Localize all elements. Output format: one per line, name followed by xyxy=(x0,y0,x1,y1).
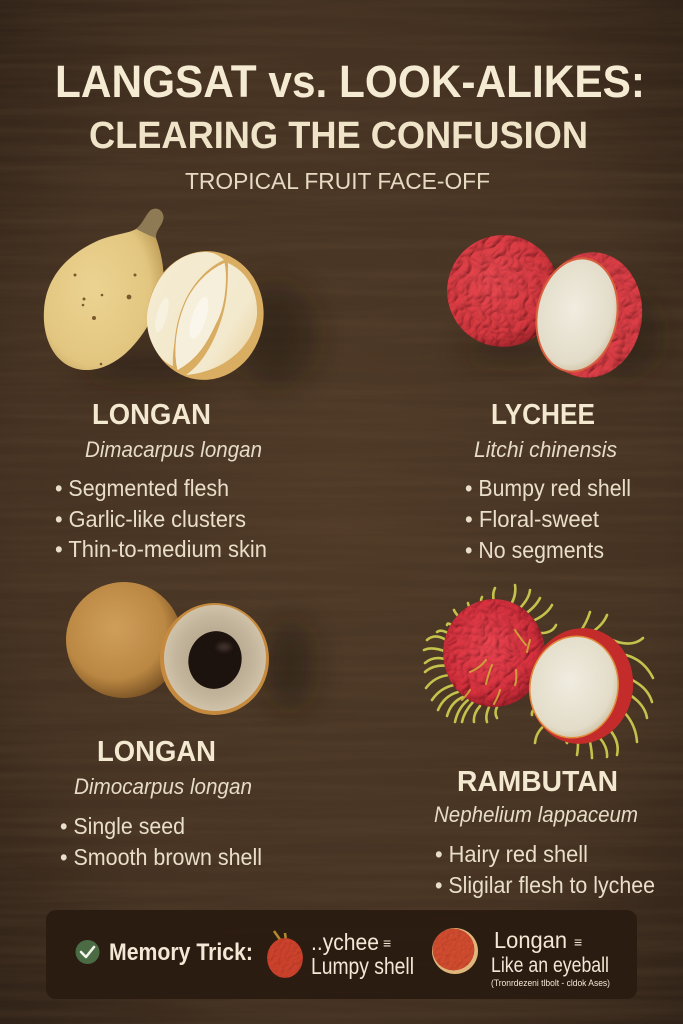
bullet list: lychee: • Bumpy red shell xyxy=(465,475,631,501)
label: longan heading, top-left: LONGAN xyxy=(92,399,211,431)
label: rambutan heading xyxy=(434,766,638,827)
bullet list: lychee xyxy=(465,475,631,563)
label: longan heading, lower-left: LONGAN xyxy=(97,736,216,768)
label: lychee heading xyxy=(474,399,617,462)
title xyxy=(55,56,645,157)
fruit photo: langsat-like fruit and segmented flesh xyxy=(44,209,317,387)
bullet list: longan top-left: • Segmented flesh xyxy=(55,475,229,501)
title: LANGSAT vs. LOOK-ALIKES: xyxy=(55,56,645,107)
lychee memory text: ≡ xyxy=(383,935,391,951)
longan memory text: Longan xyxy=(494,927,567,953)
longan memory text: (Tronrdezeni tlbolt - cldok Ases) xyxy=(491,978,610,988)
label: lychee heading: Litchi chinensis xyxy=(474,437,617,462)
memory trick label: Memory Trick: xyxy=(109,939,253,966)
bullet list: rambutan: • Sligilar flesh to lychee xyxy=(435,872,655,898)
bullet list: longan top-left: • Thin-to-medium skin xyxy=(55,536,267,562)
lychee memory text: ..ychee xyxy=(311,929,379,955)
icon: lychee xyxy=(267,931,303,978)
label: lychee heading: LYCHEE xyxy=(491,399,595,431)
bullet list: rambutan xyxy=(435,841,655,898)
hairs lying on the rambutan shell xyxy=(462,630,530,704)
label: longan heading, lower-left: Dimocarpus longan xyxy=(74,774,252,799)
bullet list: longan top-left: • Garlic-like clusters xyxy=(55,506,246,532)
longan memory text: Like an eyeball xyxy=(491,954,609,977)
longan memory text: ≡ xyxy=(574,934,582,950)
bullet list: longan lower-left xyxy=(60,813,262,870)
lychee memory text xyxy=(311,929,414,979)
title: CLEARING THE CONFUSION xyxy=(89,115,588,157)
label: rambutan heading: Nephelium lappaceum xyxy=(434,802,638,827)
bullet list: longan lower-left: • Smooth brown shell xyxy=(60,844,262,870)
bullet list: lychee: • Floral-sweet xyxy=(465,506,600,532)
subtitle: TROPICAL FRUIT FACE-OFF xyxy=(185,168,490,194)
bullet list: longan lower-left: • Single seed xyxy=(60,813,185,839)
bullet list: rambutan: • Hairy red shell xyxy=(435,841,588,867)
fruit photo: rambutan xyxy=(424,585,653,758)
fruit photo: longan with seed xyxy=(66,582,314,715)
bullet list: lychee: • No segments xyxy=(465,537,604,563)
bullet list: longan top-left xyxy=(55,475,267,562)
lychee memory text: Lumpy shell xyxy=(311,953,414,979)
icon: check mark xyxy=(76,940,100,964)
label: longan heading, lower-left xyxy=(74,736,252,799)
longan memory text xyxy=(491,927,610,988)
fruit photo: lychee xyxy=(447,235,661,385)
panel: memory trick xyxy=(46,910,637,999)
icon: longan xyxy=(432,928,478,974)
label: longan heading, top-left xyxy=(85,399,262,462)
label: longan heading, top-left: Dimacarpus longan xyxy=(85,437,262,462)
label: rambutan heading: RAMBUTAN xyxy=(457,766,618,798)
